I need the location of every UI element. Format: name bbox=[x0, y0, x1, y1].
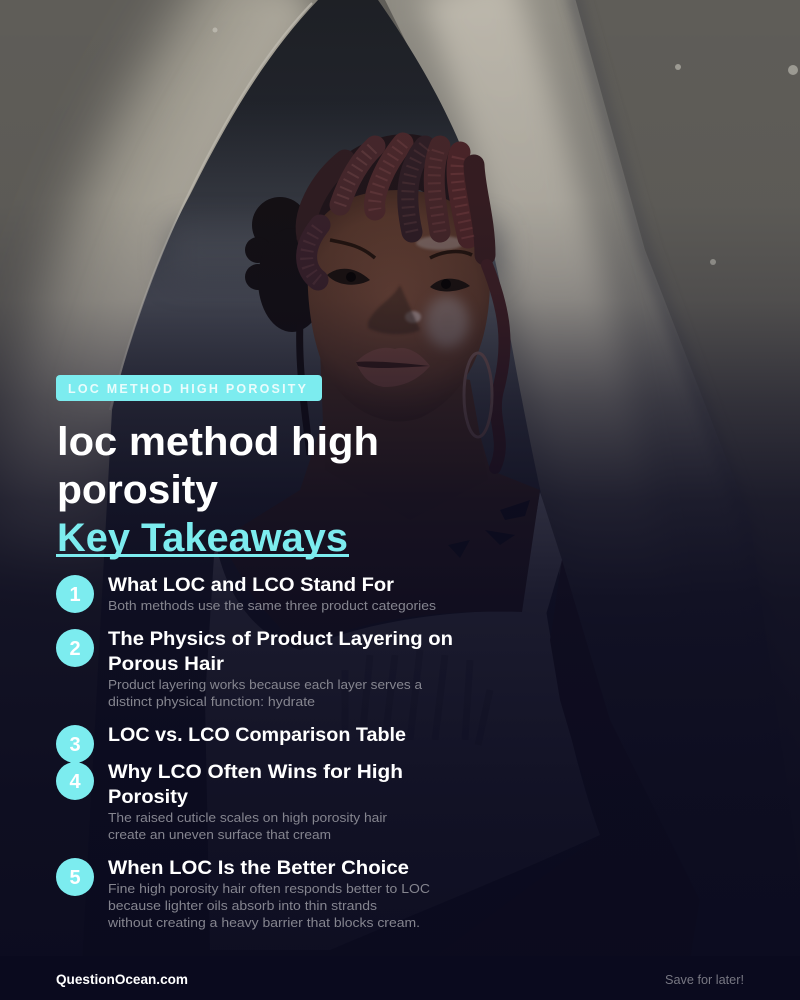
title: loc method high bbox=[57, 420, 379, 464]
number badge 5 bbox=[56, 858, 94, 896]
takeaway 3 bbox=[56, 725, 406, 763]
footer call to action: Save for later! bbox=[665, 973, 744, 987]
number badge 3 bbox=[56, 725, 94, 763]
description 2: Product layering works because each layer serves a bbox=[108, 677, 423, 692]
neck bbox=[320, 350, 488, 520]
number badge 1: 1 bbox=[69, 584, 81, 606]
number badge 3: 3 bbox=[69, 734, 81, 756]
description 5: without creating a heavy barrier that blocks cream. bbox=[107, 915, 420, 930]
title bbox=[56, 420, 379, 560]
badge text: LOC METHOD HIGH POROSITY bbox=[68, 382, 307, 396]
description 2: distinct physical function: hydrate bbox=[108, 694, 315, 709]
heading 3: LOC vs. LCO Comparison Table bbox=[108, 725, 406, 746]
dress bbox=[205, 540, 600, 950]
footer site name: QuestionOcean.com bbox=[56, 972, 188, 987]
description 4 bbox=[108, 810, 388, 842]
heading 4 bbox=[108, 762, 403, 808]
takeaway 1 bbox=[56, 575, 437, 613]
shoulders and chest bbox=[220, 400, 540, 650]
right arm bbox=[430, 560, 700, 960]
takeaway 4 bbox=[56, 762, 403, 842]
number badge 2 bbox=[56, 629, 94, 667]
number badge 5: 5 bbox=[69, 867, 81, 889]
left pillar lit band bbox=[50, 0, 285, 560]
right side loc bbox=[487, 265, 505, 468]
fringe locs bbox=[306, 143, 485, 280]
heading 5: When LOC Is the Better Choice bbox=[108, 858, 409, 879]
heading 4: Porosity bbox=[108, 787, 188, 808]
number badge 2: 2 bbox=[69, 638, 81, 660]
description 4: create an uneven surface that cream bbox=[108, 827, 331, 842]
heading 1: What LOC and LCO Stand For bbox=[108, 575, 395, 596]
background band in arch bbox=[170, 225, 500, 280]
number badge 4: 4 bbox=[69, 771, 81, 793]
eyebrows bbox=[330, 240, 472, 258]
nose light bbox=[405, 311, 421, 323]
description 1: Both methods use the same three product categories bbox=[108, 598, 437, 613]
back hair bun bbox=[245, 197, 326, 332]
nose bbox=[368, 285, 420, 334]
takeaway 5 bbox=[56, 858, 430, 930]
lips bbox=[356, 348, 430, 387]
hair cap bbox=[296, 134, 495, 250]
footer bar bbox=[0, 956, 800, 1000]
title: porosity bbox=[57, 468, 219, 512]
description 4: The raised cuticle scales on high porosity hair bbox=[108, 810, 388, 825]
earring bbox=[464, 353, 492, 437]
left side loc bbox=[300, 320, 310, 455]
arch rim highlight bbox=[110, 3, 312, 410]
wall highlights bbox=[212, 28, 798, 265]
heading 4: Why LCO Often Wins for High bbox=[108, 762, 403, 783]
takeaway 2 bbox=[56, 629, 453, 709]
number badge 1 bbox=[56, 575, 94, 613]
description 2 bbox=[108, 677, 423, 709]
left pillar inner band bbox=[100, 0, 290, 420]
heading 2 bbox=[108, 629, 453, 675]
badge bbox=[56, 375, 322, 401]
heading 2: Porous Hair bbox=[108, 654, 225, 675]
dress pleats bbox=[345, 650, 490, 745]
number badge 4 bbox=[56, 762, 94, 800]
description 5: because lighter oils absorb into thin strands bbox=[108, 898, 378, 913]
crease between pillar and wall bbox=[572, 0, 790, 760]
heading 2: The Physics of Product Layering on bbox=[108, 629, 453, 650]
dark arch opening bbox=[80, 0, 650, 1000]
right pillar lit band bbox=[465, 0, 630, 620]
badge background bbox=[56, 375, 322, 401]
forehead light bbox=[416, 236, 464, 250]
cheek light bbox=[425, 296, 469, 348]
description 5 bbox=[107, 881, 430, 930]
eyes bbox=[327, 269, 470, 291]
loc texture bbox=[307, 143, 468, 280]
tattoos bbox=[448, 500, 530, 558]
description 5: Fine high porosity hair often responds better to LOC bbox=[108, 881, 430, 896]
face bbox=[308, 190, 490, 421]
woman bbox=[205, 134, 700, 960]
title: Key Takeaways bbox=[57, 516, 348, 560]
right pillar base bbox=[375, 0, 800, 1000]
dress strap bbox=[520, 492, 562, 618]
